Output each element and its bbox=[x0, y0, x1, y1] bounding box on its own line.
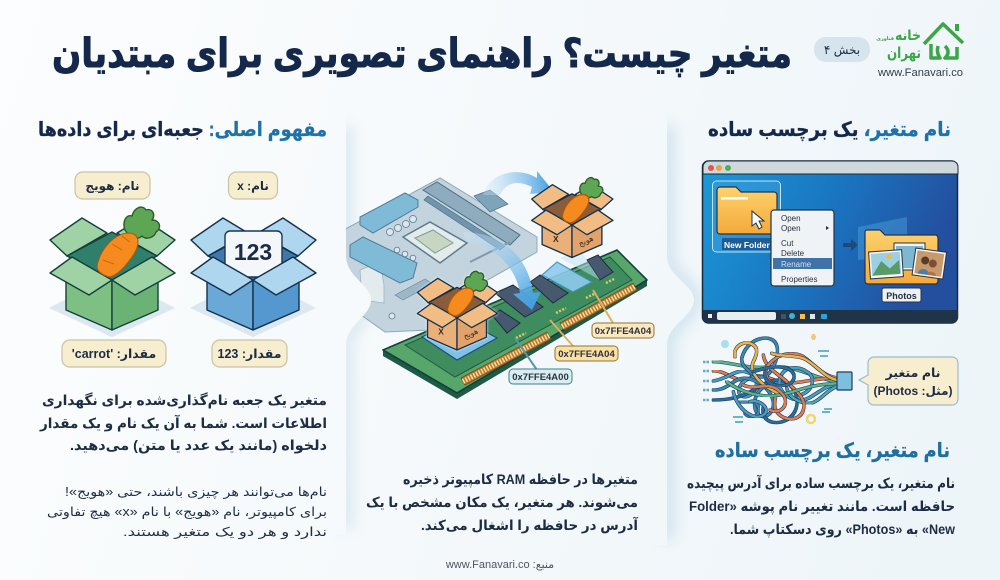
arrow: to upper box bbox=[483, 171, 554, 195]
photo: landscape bbox=[869, 250, 903, 279]
address label 3 bbox=[509, 369, 572, 384]
box: lower tan: هویج bbox=[462, 326, 479, 341]
photos folder bbox=[865, 230, 947, 302]
address label 2: 0x7FFE4A04 bbox=[558, 349, 615, 360]
text: label explanation: حافظه است. مانند تغییر نام پوشه «Folder bbox=[689, 498, 955, 515]
desktop window illustration bbox=[702, 161, 958, 323]
address label 2 bbox=[555, 346, 618, 361]
glowing chip under box bbox=[422, 318, 497, 360]
context menu bbox=[771, 210, 834, 286]
panel: center column bbox=[620, 105, 694, 545]
text: names note: برای کامپیوتر، نام «هویج» با نام «x» هیچ تفاوتی bbox=[47, 505, 327, 520]
solder dots bbox=[516, 279, 614, 338]
text: names note: نام‌ها می‌توانند هر چیزی باشند، حتی «هویج»! bbox=[65, 485, 327, 500]
logo url: www.Fanavari.co bbox=[877, 67, 963, 79]
photos folder: Photos bbox=[886, 291, 917, 301]
callout: variable name: (مثل: Photos) bbox=[873, 384, 953, 398]
selected new folder: New Folder bbox=[724, 240, 771, 250]
text: memory explanation: می‌شوند. هر متغیر، یک مکان مشخص با یک bbox=[366, 494, 638, 511]
wire decorations bbox=[703, 334, 832, 423]
box: upper tan: X bbox=[553, 234, 559, 244]
selected new folder bbox=[712, 181, 780, 252]
heading: variable name label: نام متغیر، یک برچسب ساده bbox=[715, 440, 950, 463]
text: variable definition: دلخواه (مانند یک عدد یا متن) می‌دهید. bbox=[70, 437, 327, 454]
context menu: Open bbox=[781, 224, 801, 233]
tag: name carrot bbox=[75, 172, 150, 199]
box: upper tan bbox=[532, 178, 613, 258]
title bar bbox=[703, 161, 958, 174]
illustration: motherboard bbox=[340, 178, 537, 332]
logo name bbox=[876, 27, 921, 62]
illustration: RAM stick bbox=[383, 250, 647, 399]
window bbox=[702, 161, 958, 323]
icon: carrot bbox=[97, 207, 159, 277]
tag: name x bbox=[228, 172, 278, 199]
panel divider shading: right bbox=[667, 125, 694, 540]
glowing chip bbox=[542, 262, 592, 292]
icon: cursor bbox=[752, 211, 764, 229]
heading: left panel: مفهوم اصلی: جعبه‌ای برای داده‌ها bbox=[38, 119, 327, 141]
callout: variable name bbox=[859, 357, 958, 405]
tag: value 123 bbox=[212, 340, 287, 367]
heading: right panel: نام متغیر، یک برچسب ساده bbox=[708, 119, 951, 142]
tag: name carrot: نام: هویج bbox=[85, 179, 140, 194]
text: variable definition: متغیر یک جعبه نام‌گذاری‌شده برای نگهداری bbox=[42, 392, 327, 409]
box: upper tan: هویج bbox=[577, 234, 595, 248]
logo name: خانه bbox=[895, 27, 921, 43]
box: lower tan: X bbox=[438, 327, 444, 337]
section badge: بخش ۴ bbox=[824, 43, 860, 58]
address leader lines bbox=[515, 290, 613, 370]
text: variable definition bbox=[39, 392, 327, 454]
windows light bbox=[858, 217, 907, 260]
panel divider shading: center bbox=[346, 125, 371, 530]
panel: left column bbox=[300, 105, 371, 535]
tangled wires illustration bbox=[713, 338, 837, 423]
icon: house bbox=[924, 24, 963, 58]
text: variable definition: اطلاعات است. شما به آن یک نام و یک مقدار bbox=[39, 414, 327, 432]
source: منبع: www.Fanavari.co bbox=[445, 559, 554, 571]
text: memory explanation: متغیرها در حافظه RAM کامپیوتر ذخیره bbox=[403, 471, 638, 488]
text: label explanation: نام متغیر، یک برچسب ساده برای آدرس پیچیده bbox=[687, 474, 955, 492]
context menu: Open bbox=[781, 214, 801, 223]
icon: arrow bbox=[843, 239, 858, 251]
address label 1 bbox=[592, 323, 654, 338]
box: blue with 123 bbox=[190, 218, 316, 337]
contacts bbox=[461, 283, 637, 385]
chips bbox=[492, 255, 613, 333]
tag: value 123: مقدار: 123 bbox=[218, 347, 281, 361]
text: label explanation bbox=[687, 474, 955, 538]
tag: value carrot: مقدار: 'carrot' bbox=[72, 347, 156, 361]
box: green with carrot bbox=[49, 207, 175, 337]
board bbox=[383, 250, 647, 393]
wire connector bbox=[837, 372, 852, 390]
address label 3: 0x7FFE4A00 bbox=[512, 372, 569, 383]
section badge bbox=[814, 37, 870, 62]
tag: value carrot bbox=[62, 340, 166, 367]
traffic lights bbox=[708, 165, 731, 171]
arrow: down to RAM chip bbox=[463, 232, 541, 310]
text: label explanation: New» به «Photos» روی دسکتاپ شما. bbox=[730, 521, 955, 538]
tag: name x: نام: x bbox=[237, 179, 269, 194]
photo: people bbox=[912, 248, 947, 279]
board edge bbox=[383, 280, 647, 399]
context menu: Cut bbox=[781, 239, 794, 248]
taskbar bbox=[703, 310, 958, 323]
logo bbox=[876, 24, 963, 79]
text: names note: ندارد و هر دو یک متغیر هستند. bbox=[123, 525, 327, 540]
title: متغیر چیست؟ راهنمای تصویری برای مبتدیان bbox=[52, 32, 792, 77]
text: memory explanation: آدرس در حافظه را اشغال می‌کند. bbox=[421, 516, 639, 533]
callout: variable name: نام متغیر bbox=[885, 366, 940, 381]
text: memory explanation bbox=[366, 471, 639, 533]
text: names note bbox=[47, 485, 327, 540]
address label 1: 0x7FFE4A04 bbox=[595, 326, 652, 337]
number card: 123 bbox=[234, 239, 272, 265]
context menu: Properties bbox=[781, 275, 817, 284]
logo name: تهران bbox=[887, 45, 921, 62]
logo name: فناوری bbox=[876, 36, 894, 42]
context menu: Rename bbox=[781, 260, 812, 269]
box: lower tan bbox=[417, 271, 497, 350]
context menu: Delete bbox=[781, 249, 805, 258]
